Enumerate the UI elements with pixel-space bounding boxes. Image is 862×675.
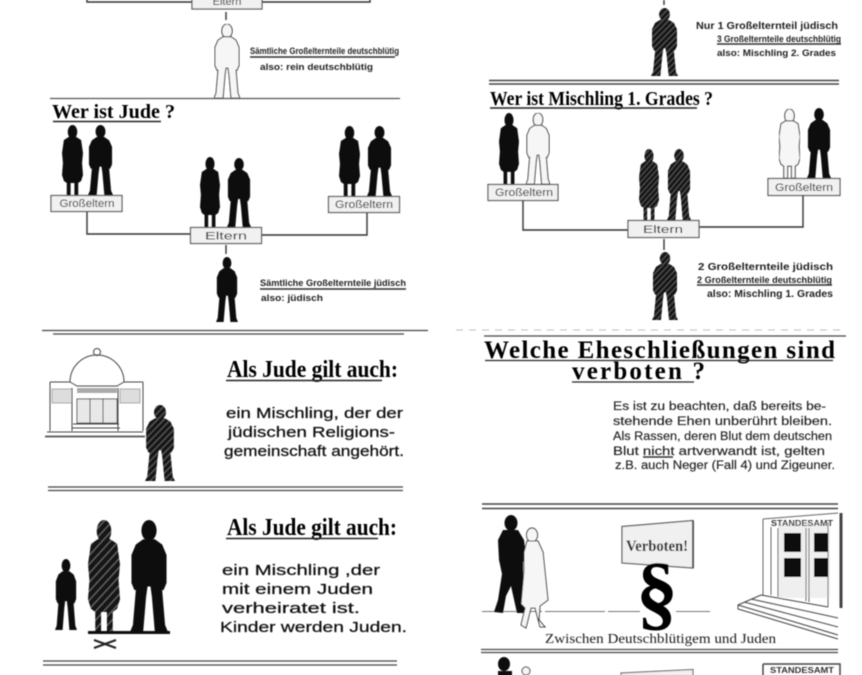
text: Nur 1 Großelternteil jüdisch: Nur 1 Großelternteil jüdisch — [696, 21, 838, 32]
text block: Mischling verheiratet: verheiratet ist. — [222, 600, 360, 617]
text: 2 Großelternteile jüdisch: 2 Großelternteile deutschblütig — [697, 275, 832, 285]
panel: Wer ist Mischling 1. Grades — [456, 88, 846, 336]
box: Großeltern right — [768, 178, 840, 196]
text: Sämtliche Großelternteile deutschblütig: also: rein deutschblütig — [260, 62, 373, 72]
text block: Es ist zu beachten: Blut nicht artverwandt ist, gelten — [613, 446, 825, 458]
text block: Es ist zu beachten: Als Rassen, deren Blut dem deutschen — [613, 431, 832, 443]
text block: Es ist zu beachten: stehende Ehen unberührt bleiben. — [613, 416, 832, 428]
heading: Als Jude gilt auch: Als Jude gilt auch: — [227, 515, 397, 541]
figure: clipped man head — [498, 657, 512, 675]
icon: synagogue — [45, 348, 145, 436]
figures: grandparents left — [62, 125, 113, 195]
text: Sämtliche Großelternteile jüdisch: also: jüdisch — [261, 293, 323, 303]
text: Sämtliche Großelternteile jüdisch — [260, 278, 406, 303]
figure: clipped woman head — [522, 667, 530, 675]
text: Sämtliche Großelternteile jüdisch: Sämtliche Großelternteile jüdisch — [260, 278, 406, 288]
text block: Mischling Religionsgemeinschaft — [224, 405, 404, 460]
heading: Als Jude gilt auch: Als Jude gilt auch: — [227, 357, 398, 383]
box: Eltern (clipped) — [192, 0, 262, 9]
text block: Mischling verheiratet: Kinder werden Juden. — [220, 619, 407, 636]
text block: Mischling verheiratet — [220, 562, 407, 636]
figure: walking black man — [494, 515, 526, 613]
sign: clipped — [621, 670, 693, 675]
panel: rein deutschblütig (top left) — [50, 0, 400, 98]
text block: Mischling Religionsgemeinschaft: gemeinschaft angehört. — [224, 443, 404, 460]
text: 2 Großelternteile jüdisch: also: Mischling 1. Grades — [707, 289, 833, 300]
text block: Es ist zu beachten: z.B. auch Neger (Fall 4) und Zigeuner. — [615, 460, 835, 472]
heading: Welche Eheschließungen sind verboten ? — [484, 337, 835, 385]
box: Eltern: Eltern — [205, 230, 247, 242]
box: Eltern: Eltern — [643, 224, 683, 236]
text: Nur 1 Großelternteil jüdisch: 3 Großelternteile deutschblütig — [717, 34, 841, 44]
figures: parents — [200, 157, 251, 227]
heading: Welche Eheschließungen sind verboten ?: verboten ? — [572, 358, 705, 385]
icon: clipped Standesamt — [763, 664, 840, 675]
box: Großeltern left — [488, 184, 558, 200]
box: Großeltern right: Großeltern — [775, 182, 833, 194]
heading: Welche Eheschließungen sind verboten ?: Welche Eheschließungen sind — [484, 337, 835, 364]
figure: white man — [214, 24, 240, 98]
sign: Verboten!: Verboten! — [626, 538, 688, 555]
icon: paragraph sign: § — [636, 546, 678, 639]
panel: Welche Eheschließungen sind verboten — [482, 337, 838, 508]
figure: hatched man — [651, 8, 678, 76]
heading: Wer ist Mischling 1. Grades ?: Wer ist Mischling 1. Grades ? — [490, 88, 713, 110]
icon: Standesamt building: STANDESAMT — [771, 519, 833, 528]
panel: Zwischen Deutschblütigem und Juden — [481, 513, 841, 652]
panel: next couple (clipped at bottom) — [498, 657, 840, 675]
box: Großeltern left — [51, 196, 122, 212]
icon: clipped Standesamt: STANDESAMT — [770, 665, 835, 675]
text: Sämtliche Großelternteile deutschblütig: Sämtliche Großelternteile deutschblütig — [250, 46, 399, 56]
figures: grandparents right — [339, 126, 392, 196]
figure: white woman — [521, 528, 548, 628]
panel: Als Jude gilt auch – Religionsgemeinschaft — [45, 348, 404, 490]
sign: Verboten! — [622, 520, 693, 568]
heading: Wer ist Jude ?: Wer ist Jude ? — [52, 101, 175, 123]
text block: Mischling Religionsgemeinschaft: ein Mischling, der der — [226, 405, 403, 422]
text: Sämtliche Großelternteile deutschblütig — [250, 46, 399, 72]
box: Großeltern left: Großeltern — [495, 187, 553, 199]
text block: Mischling verheiratet: mit einem Juden — [222, 581, 373, 598]
box: Eltern — [628, 220, 699, 238]
text: 2 Großelternteile jüdisch — [697, 262, 833, 300]
text: Nur 1 Großelternteil jüdisch: also: Mischling 2. Grades — [717, 48, 836, 58]
figures: grandparents left — [499, 113, 550, 184]
text block: Mischling Religionsgemeinschaft: jüdischen Religions- — [227, 424, 395, 441]
figure: black man — [216, 257, 238, 322]
panel: Mischling 2. Grades (top right) — [489, 0, 841, 84]
figure: hatched man — [652, 252, 678, 320]
text block: Es ist zu beachten — [613, 401, 835, 472]
panel: Wer ist Jude — [42, 101, 428, 334]
box: Großeltern right: Großeltern — [335, 199, 393, 211]
box: Eltern — [190, 228, 262, 244]
icon: cross mark — [94, 640, 116, 648]
text block: Mischling verheiratet: ein Mischling ,der — [222, 562, 380, 579]
figures: family — [55, 520, 170, 632]
text: 2 Großelternteile jüdisch: 2 Großelternteile jüdisch — [698, 262, 833, 273]
icon: Standesamt building — [738, 513, 841, 639]
text block: Es ist zu beachten: Es ist zu beachten, daß bereits be- — [613, 401, 826, 413]
text: Nur 1 Großelternteil jüdisch — [696, 21, 841, 58]
figures: hatched parents — [639, 149, 691, 220]
figures: grandparents right — [779, 108, 831, 178]
figure: hatched man by synagogue — [145, 405, 175, 481]
box: Großeltern right — [328, 196, 400, 212]
panel: Als Jude gilt auch – verheiratet — [43, 515, 407, 665]
box: Großeltern left: Großeltern — [60, 198, 114, 210]
caption: Zwischen Deutschblütigem und Juden: Zwischen Deutschblütigem und Juden — [545, 632, 776, 647]
